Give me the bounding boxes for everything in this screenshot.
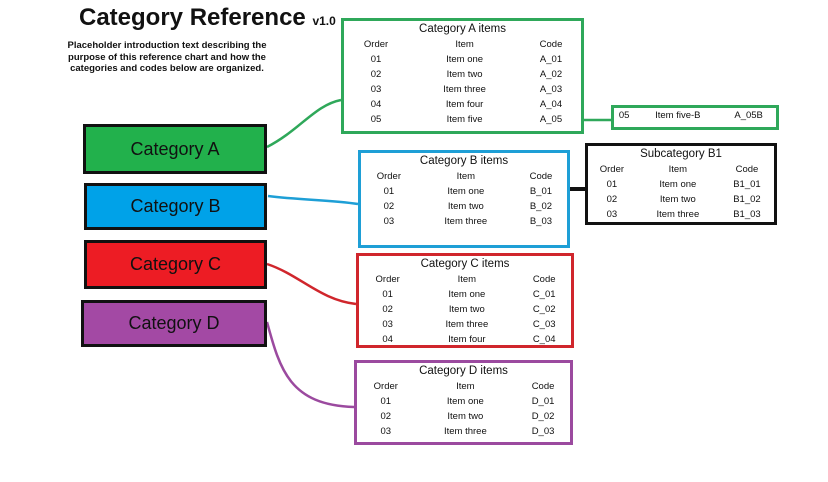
- category box: C: [84, 240, 267, 289]
- panel: category A table: A_04: [540, 99, 562, 110]
- panel: category B sub-table: 02: [607, 194, 617, 205]
- panel: category B table: Code: [530, 171, 552, 182]
- panel: category C table: Item three: [445, 319, 488, 330]
- panel: category A table: A_01: [540, 54, 562, 65]
- panel: category B table: B_01: [530, 186, 552, 197]
- panel: category B sub-table: Item one: [659, 179, 696, 190]
- panel: category B sub-table: B1_02: [733, 194, 761, 205]
- panel: category A table: Item five: [447, 114, 483, 125]
- panel: category A table: Item one: [446, 54, 483, 65]
- panel: category D table: D_03: [532, 426, 554, 437]
- intro text: Placeholder introduction text describing the purpose of this reference chart and how the categories and codes below are organized.: [68, 40, 266, 74]
- panel: category A table: Item: [455, 39, 474, 50]
- panel: category B table: Item two: [448, 201, 484, 212]
- panel: category C table: 03: [382, 319, 393, 330]
- panel: category C table: Code: [533, 274, 556, 285]
- panel: category D table: 01: [381, 396, 391, 407]
- panel: category B sub-table: Item: [669, 164, 687, 175]
- panel: category B table: Item one: [447, 186, 484, 197]
- panel: category A table: 03: [371, 84, 381, 95]
- panel: category D table: Category D items: [419, 365, 508, 377]
- panel: category A table: A_03: [540, 84, 562, 95]
- panel: category C table: Item four: [448, 334, 486, 345]
- panel: category B table: 03: [384, 216, 394, 227]
- panel: category D table: [354, 360, 573, 445]
- panel: category C table: Category C items: [421, 258, 509, 270]
- panel: category D table: D_02: [532, 411, 554, 422]
- panel: category B table: Item: [457, 171, 475, 182]
- panel: category B sub-table: 01: [607, 179, 617, 190]
- panel: category A extension: Item five-B: [655, 110, 700, 121]
- panel: category A table: 05: [371, 114, 381, 125]
- panel: category A table: Item three: [443, 84, 486, 95]
- panel: category C table: 02: [382, 304, 393, 315]
- category box: D: Category D: [128, 313, 220, 333]
- panel: category B sub-table: Order: [600, 164, 624, 175]
- panel: category D table: Code: [532, 381, 554, 392]
- panel: category B sub-table: Item three: [656, 209, 699, 220]
- panel: category B table: 02: [384, 201, 394, 212]
- panel: category C table: [356, 253, 574, 348]
- panel: category A table: 04: [371, 99, 381, 110]
- panel: category A extension: [611, 105, 779, 130]
- panel: category A table: Item two: [447, 69, 483, 80]
- panel: category A table: Code: [540, 39, 562, 50]
- panel: category B sub-table: Item two: [660, 194, 696, 205]
- panel: category B table: Item three: [444, 216, 487, 227]
- panel: category B table: B_02: [530, 201, 552, 212]
- panel: category C table: Order: [376, 274, 400, 285]
- panel: category C table: C_04: [533, 334, 556, 345]
- category box: D: [81, 300, 267, 347]
- panel: category D table: Item: [456, 381, 475, 392]
- category box: B: Category B: [130, 196, 221, 216]
- panel: category C table: Item two: [449, 304, 485, 315]
- panel: category C table: C_03: [533, 319, 556, 330]
- panel: category B table: 01: [384, 186, 394, 197]
- panel: category A table: [341, 18, 584, 134]
- panel: category B sub-table: Code: [736, 164, 758, 175]
- category box: A: [83, 124, 267, 174]
- panel: category B table: B_03: [530, 216, 552, 227]
- panel: category D table: 02: [381, 411, 391, 422]
- panel: category A extension: 05: [619, 110, 629, 121]
- panel: category C table: C_01: [533, 289, 556, 300]
- panel: category B sub-table: Subcategory B1: [640, 148, 722, 160]
- category box: A: Category A: [130, 138, 220, 158]
- panel: category B sub-table: B1_03: [733, 209, 761, 220]
- panel: category A table: 01: [371, 54, 381, 65]
- panel: category D table: Item two: [447, 411, 483, 422]
- title: Category Reference v1.0: [79, 4, 336, 31]
- panel: category C table: C_02: [533, 304, 556, 315]
- panel: category B sub-table: 03: [607, 209, 617, 220]
- panel: category A table: 02: [371, 69, 381, 80]
- panel: category B table: Order: [377, 171, 401, 182]
- panel: category D table: D_01: [532, 396, 554, 407]
- panel: category A extension: A_05B: [734, 110, 763, 121]
- panel: category C table: 01: [382, 289, 393, 300]
- panel: category D table: 03: [381, 426, 391, 437]
- panel: category A table: Category A items: [419, 23, 506, 35]
- panel: category B table: Category B items: [420, 155, 508, 167]
- panel: category A table: A_05: [540, 114, 562, 125]
- panel: category B sub-table: [585, 143, 777, 225]
- panel: category C table: Item one: [448, 289, 485, 300]
- panel: category D table: Order: [374, 381, 398, 392]
- panel: category A table: Item four: [446, 99, 483, 110]
- panel: category B sub-table: B1_01: [733, 179, 761, 190]
- panel: category D table: Item one: [447, 396, 484, 407]
- panel: category A table: A_02: [540, 69, 562, 80]
- panel: category D table: Item three: [444, 426, 487, 437]
- category box: C: Category C: [130, 254, 221, 274]
- panel: category A table: Order: [364, 39, 388, 50]
- panel: category C table: 04: [382, 334, 393, 345]
- panel: category C table: Item: [458, 274, 476, 285]
- category box: B: [84, 183, 267, 230]
- panel: category B table: [358, 150, 570, 248]
